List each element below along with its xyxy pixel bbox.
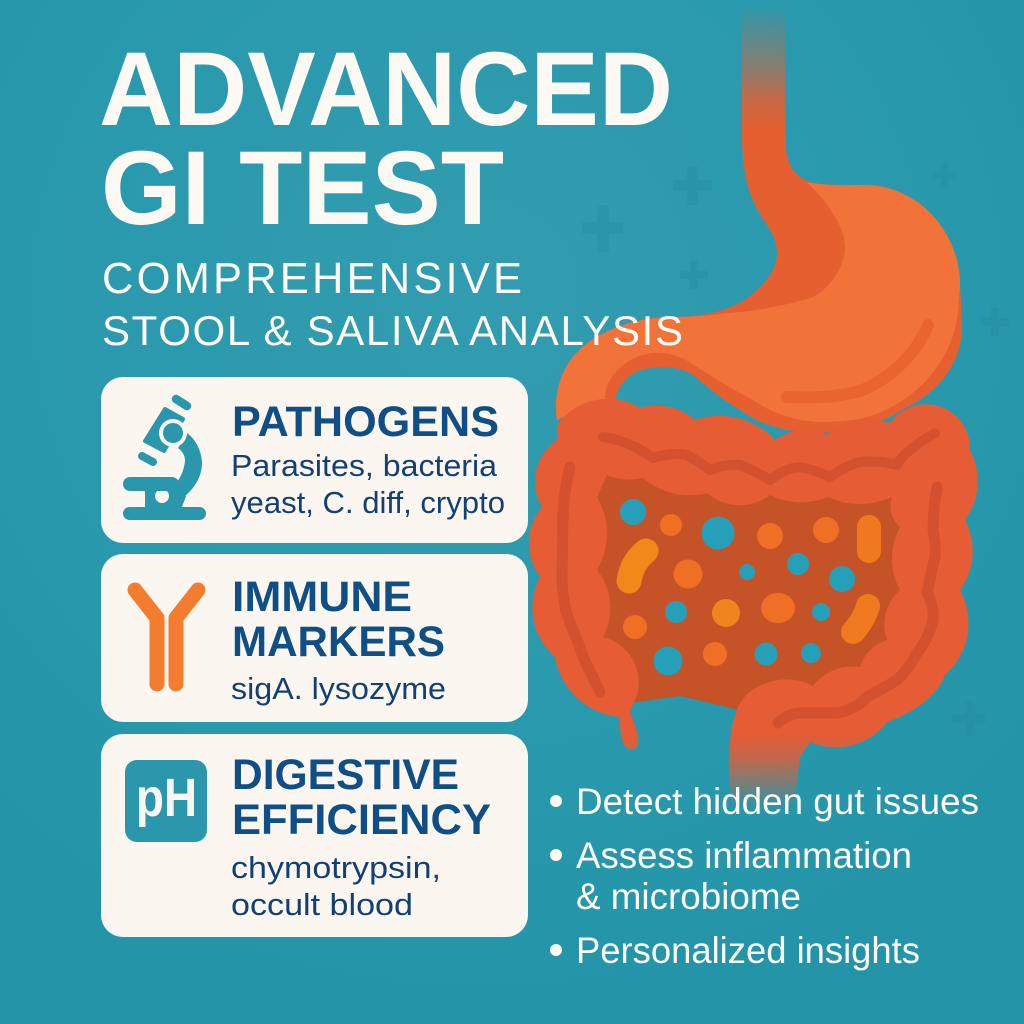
bullet: inflammation and microbiome: Assess inflammation xyxy=(576,834,912,876)
bacteria bean: left xyxy=(629,551,646,581)
text: immune detail: sigA. lysozyme xyxy=(231,671,446,706)
text: digestive detail: chymotrypsin, xyxy=(231,850,441,885)
heading: immune markers xyxy=(232,574,445,666)
text: pathogens detail xyxy=(231,448,505,520)
heading: pathogens: PATHOGENS xyxy=(232,399,499,446)
bullet: inflammation and microbiome: & microbiome xyxy=(576,875,801,917)
colon fold: transverse xyxy=(603,433,935,480)
bullet: personalized insights: Personalized insights xyxy=(576,929,920,971)
bacteria dots: orange xyxy=(623,514,839,666)
panel: digestive efficiency xyxy=(101,734,528,937)
bacteria capsule: right xyxy=(857,515,881,563)
panel: immune markers xyxy=(101,554,528,722)
icon: pH: pH xyxy=(136,768,197,828)
subtitle: COMPREHENSIVE xyxy=(102,255,522,303)
bullet list xyxy=(550,780,979,971)
icon: antibody xyxy=(135,590,198,684)
text: pathogens detail: yeast, C. diff, crypto xyxy=(231,485,505,520)
heading: digestive efficiency: DIGESTIVE xyxy=(232,752,459,799)
colon outline xyxy=(529,399,978,815)
bacteria bean: lower right xyxy=(853,606,868,632)
bullet: hidden gut issues: Detect hidden gut issues xyxy=(576,780,979,822)
heading: immune markers: MARKERS xyxy=(232,619,445,666)
title: ADVANCED xyxy=(99,31,673,148)
stomach body xyxy=(556,182,960,422)
heading: digestive efficiency: EFFICIENCY xyxy=(232,797,491,844)
stomach crease xyxy=(787,325,928,398)
panel: pathogens xyxy=(101,377,528,543)
text: pathogens detail: Parasites, bacteria xyxy=(231,448,498,483)
bacteria dots: teal xyxy=(620,499,855,676)
text: digestive detail: occult blood xyxy=(231,887,413,922)
illustration: intestines xyxy=(529,399,978,815)
bacteria dot: amber xyxy=(712,599,740,627)
small intestine background xyxy=(590,460,915,715)
text: digestive detail xyxy=(231,850,441,922)
stomach silhouette and esophagus xyxy=(556,0,962,433)
subtitle: STOOL & SALIVA ANALYSIS xyxy=(102,307,683,354)
icon: microscope xyxy=(123,399,206,520)
colon fold: descending xyxy=(778,487,937,723)
decorative plus signs xyxy=(582,162,1009,736)
subtitle xyxy=(102,255,683,354)
heading: digestive efficiency xyxy=(232,752,491,844)
illustration: stomach xyxy=(556,0,962,433)
title: GI TEST xyxy=(101,130,504,247)
icon: pH xyxy=(125,760,207,842)
colon fold: ascending xyxy=(562,467,600,692)
title xyxy=(99,31,673,247)
bullet: inflammation and microbiome xyxy=(550,834,912,917)
heading: immune markers: IMMUNE xyxy=(232,574,412,621)
